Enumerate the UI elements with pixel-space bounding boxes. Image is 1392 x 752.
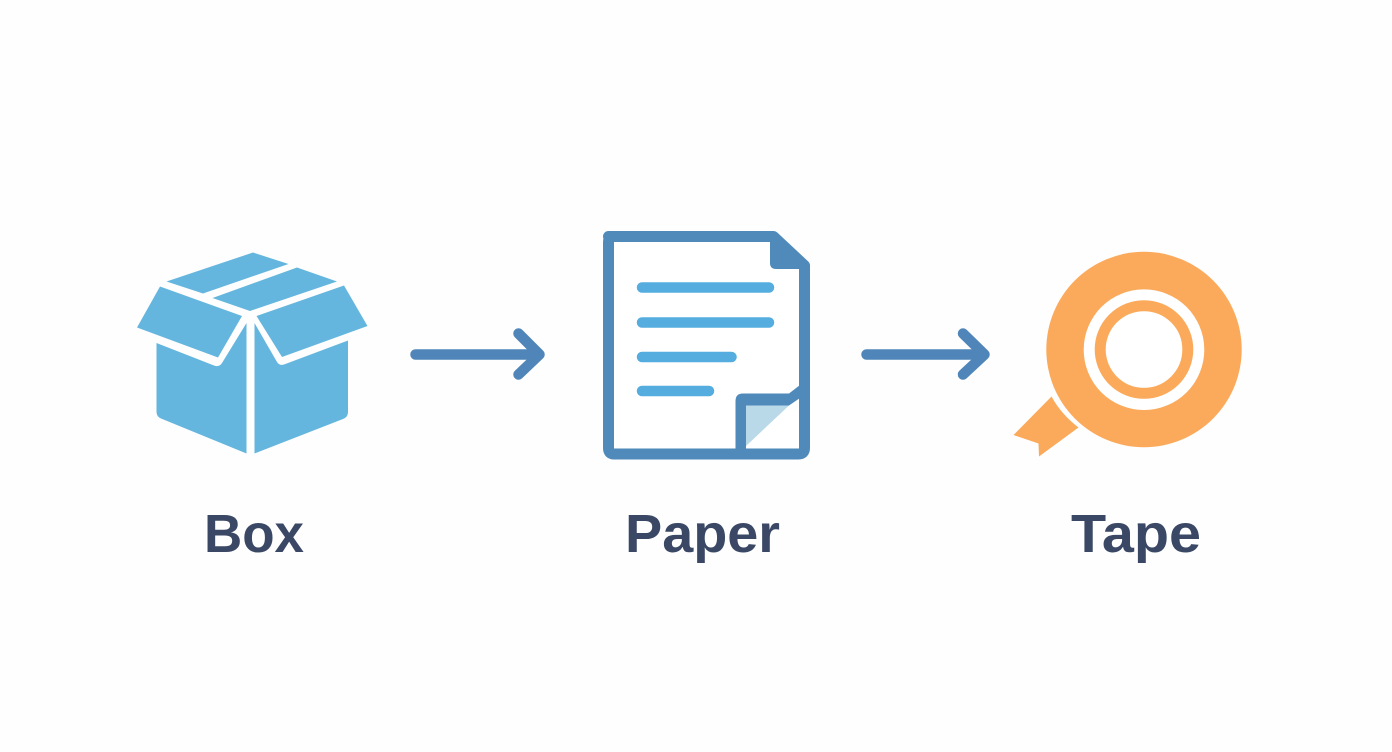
icon: open box bbox=[137, 252, 368, 454]
arrow: paper to tape bbox=[866, 334, 984, 374]
inner core bbox=[1100, 306, 1188, 393]
label: Box: Box bbox=[204, 504, 304, 564]
tape body bbox=[1046, 252, 1242, 447]
tape tail bbox=[1014, 396, 1078, 456]
label: Paper: Paper bbox=[625, 504, 780, 564]
bottom corner curl bbox=[736, 385, 800, 449]
curl highlight bbox=[746, 406, 789, 446]
text lines bbox=[642, 288, 769, 391]
arrow: box to paper bbox=[416, 334, 540, 374]
top corner fold bbox=[770, 238, 805, 269]
icon: tape roll bbox=[1014, 252, 1242, 456]
icon: paper document bbox=[608, 236, 805, 454]
gap ring bbox=[1084, 289, 1204, 410]
page outline bbox=[608, 236, 804, 454]
label: Tape: Tape bbox=[1071, 504, 1201, 564]
